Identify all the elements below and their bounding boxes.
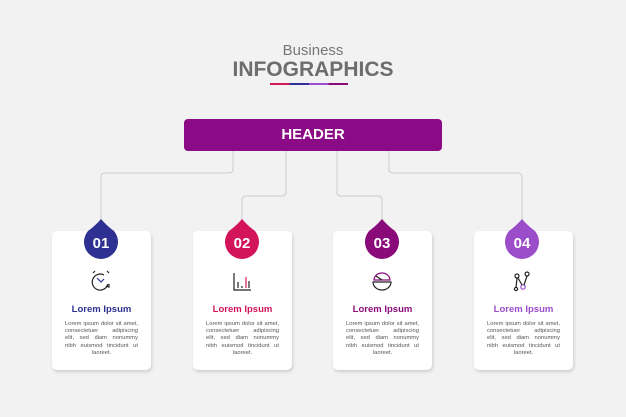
- card 4: elit, sed diam nonummy: [487, 335, 560, 341]
- card 1: elit, sed diam nonummy: [65, 335, 138, 341]
- card 4: nibh euismod tincidunt ut: [487, 343, 560, 349]
- drop 04: 04: [514, 235, 531, 252]
- card 4: Lorem ipsum dolor sit amet,: [487, 321, 560, 327]
- drop 02: [225, 219, 259, 259]
- drop 03: 03: [374, 235, 390, 252]
- card 2: laoreet.: [233, 350, 252, 356]
- title: Business: [283, 42, 343, 59]
- card 1: laoreet.: [92, 350, 111, 356]
- card 2: Lorem Ipsum: [213, 304, 272, 315]
- header bar: HEADER: [281, 126, 345, 143]
- card 1: nibh euismod tincidunt ut: [65, 343, 138, 349]
- card 2: elit, sed diam nonummy: [206, 335, 279, 341]
- icon: bar chart: [234, 273, 251, 290]
- title: INFOGRAPHICS: [232, 58, 394, 81]
- card 4: laoreet.: [514, 350, 533, 356]
- drop 01: 01: [93, 235, 109, 252]
- icon: nodes: [514, 272, 529, 291]
- card 1: Lorem ipsum dolor sit amet,: [65, 321, 138, 327]
- card 1: [52, 231, 151, 370]
- title underline: [270, 83, 348, 85]
- card 3: consectetuer adipiscing: [346, 328, 419, 334]
- card 3: laoreet.: [373, 350, 392, 356]
- card 3: [333, 231, 432, 370]
- card 1: Lorem Ipsum: [72, 304, 131, 315]
- icon: clock: [92, 271, 109, 290]
- card 3: elit, sed diam nonummy: [346, 335, 419, 341]
- drop 03: [365, 219, 399, 259]
- card 2: [193, 231, 292, 370]
- icon: bowl: [373, 273, 391, 290]
- card 4: consectetuer adipiscing: [487, 328, 560, 334]
- card 3: nibh euismod tincidunt ut: [346, 343, 419, 349]
- card 2: Lorem ipsum dolor sit amet,: [206, 321, 279, 327]
- drop 01: [84, 219, 118, 259]
- card 1: consectetuer adipiscing: [65, 328, 138, 334]
- card 4: Lorem Ipsum: [494, 304, 553, 315]
- card 4: [474, 231, 573, 370]
- card 3: Lorem Ipsum: [353, 304, 412, 315]
- card 2: consectetuer adipiscing: [206, 328, 279, 334]
- header bar: [184, 119, 442, 151]
- drop 04: [505, 219, 539, 259]
- title: [232, 42, 394, 81]
- card 2: nibh euismod tincidunt ut: [206, 343, 279, 349]
- drop 02: 02: [234, 235, 250, 252]
- card 3: Lorem ipsum dolor sit amet,: [346, 321, 419, 327]
